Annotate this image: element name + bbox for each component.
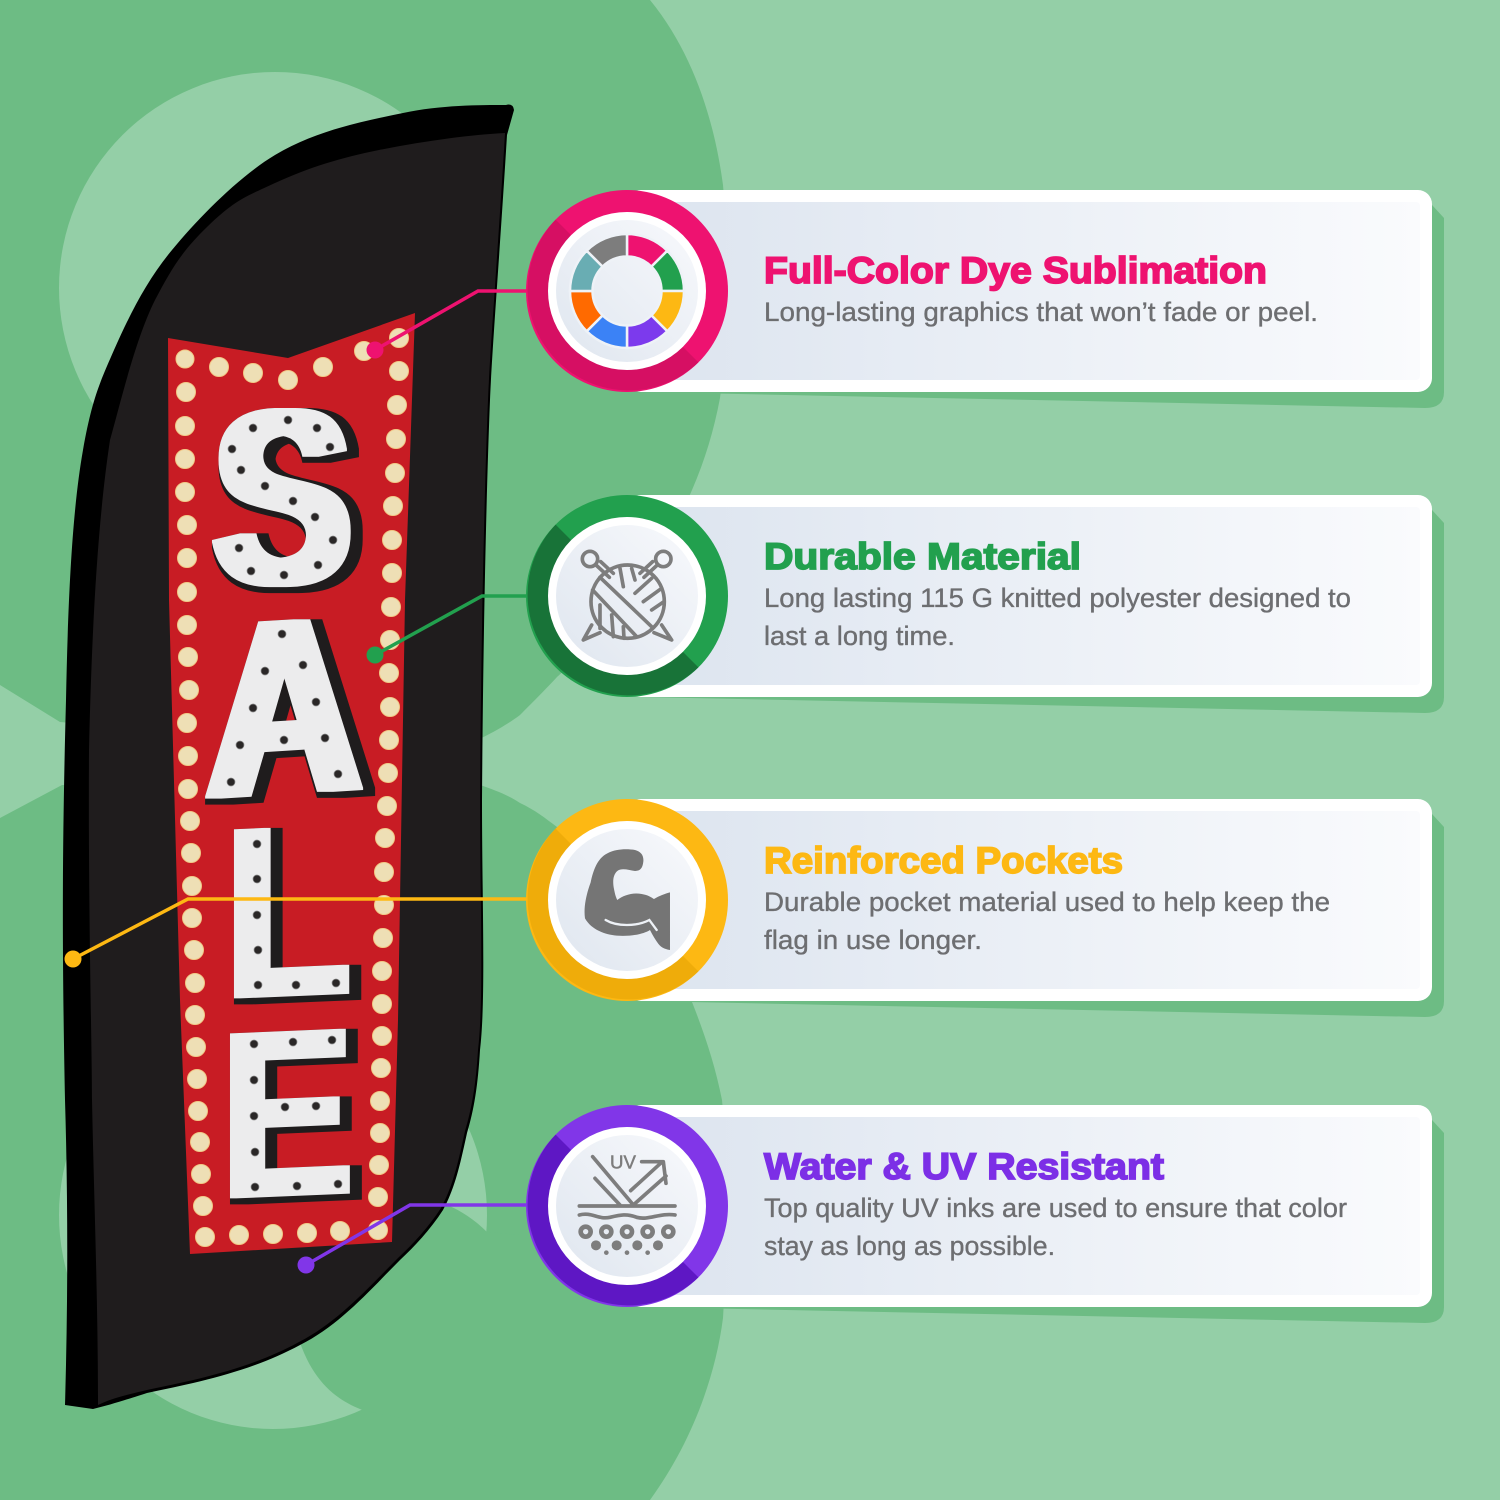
SALE lettering: A xyxy=(208,563,361,852)
description: Long-lasting graphics that won’t fade or peel. xyxy=(764,297,1318,327)
description: Durable pocket material used to help keep the xyxy=(764,887,1330,917)
feather flag xyxy=(63,105,514,1409)
description: stay as long as possible. xyxy=(764,1231,1055,1261)
heading: Water & UV Resistant xyxy=(764,1146,1164,1187)
panel: water and uv resistant xyxy=(526,1105,1444,1323)
icon badge: uv shield: UV xyxy=(610,1152,636,1173)
panel: full-color dye sublimation xyxy=(526,190,1444,408)
panel: durable material xyxy=(526,495,1444,713)
panel: reinforced pockets xyxy=(526,799,1444,1017)
description: Long lasting 115 G knitted polyester designed to xyxy=(764,583,1351,613)
SALE lettering: L xyxy=(223,774,353,1050)
heading: Reinforced Pockets xyxy=(764,840,1123,881)
heading: Full-Color Dye Sublimation xyxy=(764,250,1267,291)
icon badge: color wheel xyxy=(526,190,728,392)
SALE lettering xyxy=(208,356,361,1248)
description: last a long time. xyxy=(764,621,955,651)
flag fabric xyxy=(89,133,505,1405)
SALE lettering: E xyxy=(219,978,355,1248)
marquee bulbs xyxy=(176,328,408,1246)
connector: water and uv xyxy=(298,1205,530,1274)
connector: reinforced pockets xyxy=(64,899,530,968)
flag sleeve xyxy=(63,105,514,1409)
description xyxy=(764,1193,1347,1261)
description: Top quality UV inks are used to ensure that color xyxy=(764,1193,1347,1223)
description xyxy=(764,887,1330,955)
icon badge: uv shield xyxy=(526,1105,728,1307)
letter rivets xyxy=(227,416,342,1191)
heading: Durable Material xyxy=(764,536,1081,577)
red sale banner xyxy=(168,313,415,1254)
description: flag in use longer. xyxy=(764,925,982,955)
SALE lettering: S xyxy=(214,356,351,640)
connector: dye sublimation xyxy=(366,291,530,358)
description xyxy=(764,583,1351,651)
icon badge: yarn ball xyxy=(526,495,728,697)
connector: durable material xyxy=(366,596,530,664)
icon badge: flexed arm xyxy=(526,799,728,1001)
